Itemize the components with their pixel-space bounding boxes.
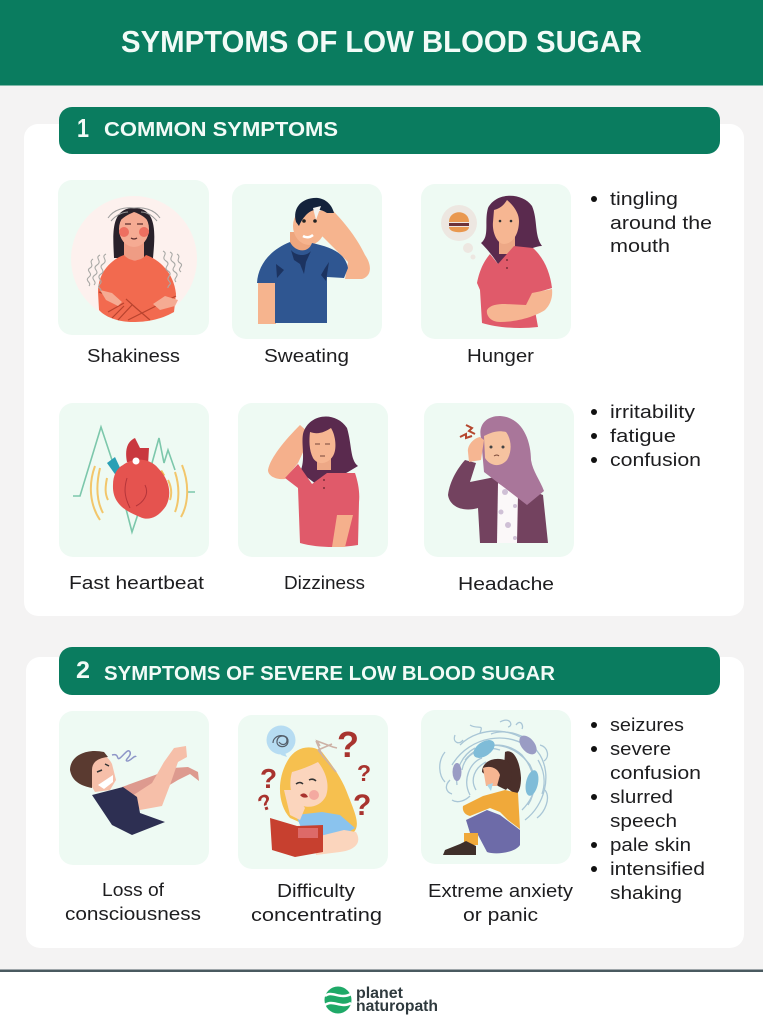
panel: common symptoms	[24, 107, 744, 616]
bullet list: tingling: around the	[610, 212, 712, 233]
section heading: severe symptoms: SYMPTOMS OF SEVERE LOW BLOOD SUGAR	[104, 663, 556, 685]
tile: difficulty concentrating: ?	[260, 763, 277, 794]
header banner	[0, 0, 763, 86]
label: shakiness: Shakiness	[87, 345, 180, 366]
section heading: severe symptoms	[59, 647, 720, 695]
label: loss of consciousness	[65, 879, 201, 924]
tile: sweating	[232, 184, 382, 339]
tile: fast heartbeat	[59, 403, 209, 557]
logo: planet naturopath: naturopath	[356, 998, 438, 1015]
tile: shakiness	[58, 180, 209, 335]
bullet list: severe symptoms: shaking	[610, 882, 682, 903]
label: extreme anxiety or panic	[428, 880, 574, 925]
bullet list: tingling: mouth	[610, 235, 670, 256]
bullet list: tingling: tingling	[610, 188, 678, 209]
bullet list: severe symptoms: slurred	[610, 786, 673, 807]
label: extreme anxiety or panic: Extreme anxiety	[428, 880, 574, 901]
bullet list: severe symptoms: severe	[610, 738, 671, 759]
tile: extreme anxiety or panic	[421, 710, 571, 864]
bullet list: severe symptoms: speech	[610, 810, 677, 831]
tile: difficulty concentrating: ?	[254, 789, 276, 817]
bullet list: severe symptoms	[591, 714, 705, 903]
label: dizziness: Dizziness	[284, 572, 365, 593]
title: SYMPTOMS OF LOW BLOOD SUGAR	[121, 24, 642, 59]
section heading: common symptoms: COMMON SYMPTOMS	[104, 119, 338, 141]
label: fast heartbeat: Fast heartbeat	[69, 572, 204, 593]
bullet list: irritability, fatigue, confusion	[591, 401, 701, 470]
bullet list: irritability, fatigue, confusion: fatigue	[610, 425, 676, 446]
label: difficulty concentrating: concentrating	[251, 904, 382, 925]
footer	[0, 970, 763, 1024]
section heading: common symptoms	[59, 107, 720, 154]
tile: difficulty concentrating: ?	[357, 760, 371, 786]
label: hunger: Hunger	[467, 345, 534, 366]
label: sweating: Sweating	[264, 345, 349, 366]
tile: difficulty concentrating: ?	[353, 789, 371, 822]
label: loss of consciousness: consciousness	[65, 903, 201, 924]
panel: severe symptoms	[26, 647, 744, 948]
label: difficulty concentrating	[251, 880, 382, 925]
label: loss of consciousness: Loss of	[102, 879, 165, 900]
bullet list: severe symptoms: pale skin	[610, 834, 691, 855]
section heading: common symptoms: 1	[77, 113, 89, 143]
label: headache: Headache	[458, 573, 554, 594]
tile: hunger	[421, 184, 571, 339]
bullet list: irritability, fatigue, confusion: irritability	[610, 401, 696, 422]
bullet list: severe symptoms: seizures	[610, 714, 684, 735]
tile: difficulty concentrating: ?	[337, 724, 359, 765]
bullet list: severe symptoms: confusion	[610, 762, 701, 783]
label: extreme anxiety or panic: or panic	[463, 904, 538, 925]
logo: planet naturopath: planet	[356, 985, 403, 1002]
bullet list: severe symptoms: intensified	[610, 858, 705, 879]
bullet list: tingling	[591, 188, 712, 256]
tile: dizziness	[238, 403, 388, 557]
tile: headache	[424, 403, 574, 557]
section heading: severe symptoms: 2	[76, 657, 90, 684]
bullet list: irritability, fatigue, confusion: confusion	[610, 449, 701, 470]
logo: planet naturopath	[324, 985, 438, 1015]
tile: difficulty concentrating	[238, 715, 388, 869]
label: difficulty concentrating: Difficulty	[277, 880, 356, 901]
tile: loss of consciousness	[59, 711, 209, 865]
